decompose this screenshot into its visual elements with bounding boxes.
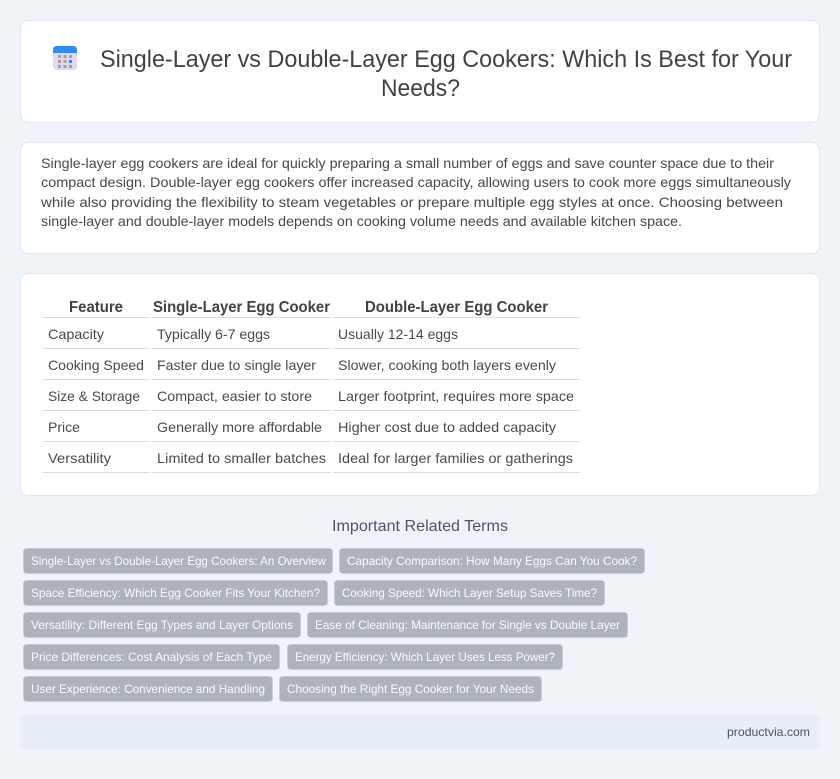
table row: capacity	[48, 326, 458, 342]
table row: size and storage: Compact, easier to store	[157, 388, 312, 404]
title: Needs?	[381, 75, 460, 102]
table row: cooking speed	[48, 357, 556, 373]
tag: Single-Layer vs Double-Layer Egg Cookers: An Overview	[31, 554, 326, 568]
table row: size and storage: Larger footprint, requires more space	[338, 388, 574, 404]
tag	[24, 580, 328, 606]
table header: Feature	[69, 299, 123, 316]
table header: Double-Layer Egg Cooker	[365, 299, 548, 316]
panel: title card	[20, 20, 820, 122]
tag: Energy Efficiency: Which Layer Uses Less Power?	[295, 650, 555, 664]
panel: introduction	[20, 142, 820, 254]
tags: related terms	[24, 548, 644, 702]
footer	[20, 715, 820, 749]
table row: versatility: Ideal for larger families or gatherings	[338, 450, 573, 466]
tag: Space Efficiency: Which Egg Cooker Fits Your Kitchen?	[31, 586, 320, 600]
tag: Cooking Speed: Which Layer Setup Saves Time?	[342, 586, 597, 600]
table row: price: Higher cost due to added capacity	[338, 419, 556, 435]
tag: Price Differences: Cost Analysis of Each Type	[31, 650, 272, 664]
table row: size and storage: Size & Storage	[48, 388, 140, 404]
tag	[24, 612, 300, 638]
text block: summary paragraph: compact design. Double-layer egg cookers offer increased capacity, allowing users to cook more eggs simultaneously	[41, 174, 791, 190]
text block: summary paragraph: single-layer and double-layer models depends on cooking volume needs and available kitchen space.	[41, 213, 682, 229]
table row: capacity: Capacity	[48, 326, 104, 342]
tag	[334, 580, 604, 606]
tag: Versatility: Different Egg Types and Layer Options	[31, 618, 293, 632]
heading: related terms: Important Related Terms	[332, 518, 508, 535]
tag	[308, 612, 628, 638]
table row: cooking speed: Slower, cooking both layers evenly	[338, 357, 556, 373]
table row: capacity: Typically 6-7 eggs	[157, 326, 270, 342]
tag	[280, 676, 542, 702]
title: Single-Layer vs Double-Layer Egg Cookers: Which Is Best for Your	[100, 46, 792, 73]
footer: productvia.com	[727, 725, 810, 739]
table row: price: Generally more affordable	[157, 419, 322, 435]
panel: comparison table	[20, 274, 820, 496]
table row: price	[48, 419, 556, 435]
icon: calendar grid	[53, 46, 77, 70]
tag	[24, 644, 280, 670]
table header: Single-Layer Egg Cooker	[153, 299, 330, 316]
table row: versatility	[48, 450, 573, 466]
tag	[288, 644, 562, 670]
table row: capacity: Usually 12-14 eggs	[338, 326, 458, 342]
title	[100, 46, 792, 102]
tag	[24, 676, 272, 702]
tag	[340, 548, 644, 574]
table row: size and storage	[48, 388, 574, 404]
table header	[69, 299, 548, 316]
table row: cooking speed: Faster due to single layer	[157, 357, 316, 373]
table row: price: Price	[48, 419, 80, 435]
tag: Ease of Cleaning: Maintenance for Single vs Double Layer	[315, 618, 620, 632]
table row: cooking speed: Cooking Speed	[48, 357, 144, 373]
table row: versatility: Limited to smaller batches	[157, 450, 326, 466]
text block: summary paragraph	[40, 155, 791, 229]
tag: Capacity Comparison: How Many Eggs Can You Cook?	[347, 554, 637, 568]
tag	[24, 548, 332, 574]
text block: summary paragraph: Single-layer egg cookers are ideal for quickly preparing a small number of eggs and save counter space due to their	[41, 155, 774, 171]
tag: Choosing the Right Egg Cooker for Your Needs	[287, 682, 534, 696]
tag: User Experience: Convenience and Handling	[31, 682, 265, 696]
table row: versatility: Versatility	[48, 450, 111, 466]
text block: summary paragraph: while also providing the flexibility to steam vegetables or prepare multiple egg styles at once. Choosing between	[40, 194, 783, 210]
